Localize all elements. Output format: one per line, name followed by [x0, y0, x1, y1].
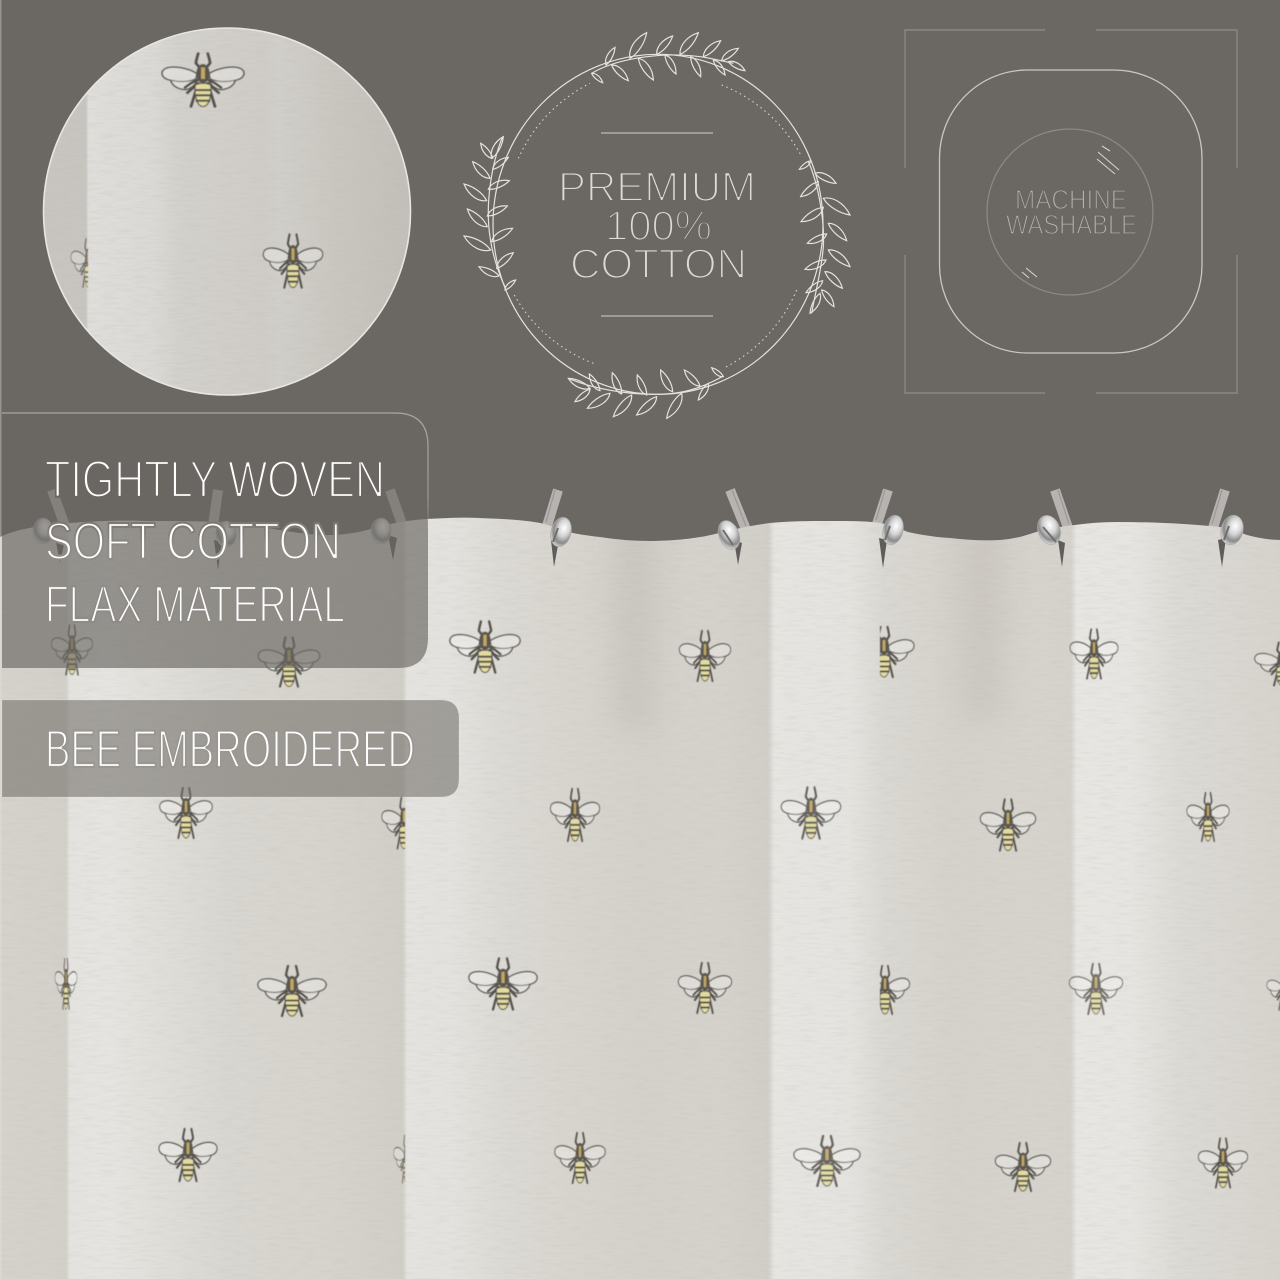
icon: bee row two [160, 788, 1229, 850]
bee pattern [52, 622, 1280, 1191]
panel: tightly woven [2, 413, 428, 668]
heading: tightly woven soft cotton flax material: SOFT COTTON [45, 513, 341, 571]
inner circle [987, 129, 1153, 295]
heading: tightly woven soft cotton flax material: FLAX MATERIAL [45, 576, 345, 634]
curtain clips [33, 512, 1247, 570]
water tick marks [1022, 146, 1119, 278]
left edge highlight [0, 0, 2, 1279]
heading: premium 100% cotton: COTTON [570, 240, 747, 287]
dotted inner ring [513, 83, 802, 368]
wreath ring [493, 54, 823, 394]
strap highlights [546, 490, 1222, 526]
wreath rules [601, 133, 713, 316]
panel: bee embroidered [2, 700, 459, 797]
heading: tightly woven soft cotton flax material [45, 451, 385, 634]
top branch [591, 30, 746, 84]
icon: bee row three [55, 958, 1280, 1016]
icon: bee right [263, 234, 323, 288]
right branch [798, 160, 853, 315]
heading: tightly woven soft cotton flax material: TIGHTLY WOVEN [45, 451, 385, 509]
icon: bee row one [52, 622, 1280, 686]
curtain ring straps [52, 490, 1225, 532]
chrome reflections [553, 526, 1229, 545]
heading: premium 100% cotton [558, 163, 756, 287]
left branch [461, 135, 517, 291]
machine washable label [1006, 184, 1137, 240]
rounded square [940, 70, 1202, 353]
badge: machine washable [905, 30, 1237, 393]
corner brackets [905, 30, 1237, 393]
heading: bee embroidered: BEE EMBROIDERED [45, 720, 415, 779]
heading: premium 100% cotton: PREMIUM [558, 163, 756, 210]
curtain fabric [0, 500, 1280, 1279]
heading: premium 100% cotton: 100% [605, 202, 712, 249]
icon: bee top [162, 54, 244, 106]
panel: fabric close-up circle [43, 28, 411, 395]
chrome balls [33, 512, 1247, 553]
spikes [55, 535, 1226, 570]
bottom branch [567, 366, 724, 421]
icon: bee row four [159, 1129, 1248, 1191]
machine washable label: WASHABLE [1006, 209, 1137, 240]
icon: bee cut off at fold [70, 238, 89, 288]
machine washable label: MACHINE [1015, 184, 1127, 215]
badge: premium cotton wreath [461, 30, 853, 421]
